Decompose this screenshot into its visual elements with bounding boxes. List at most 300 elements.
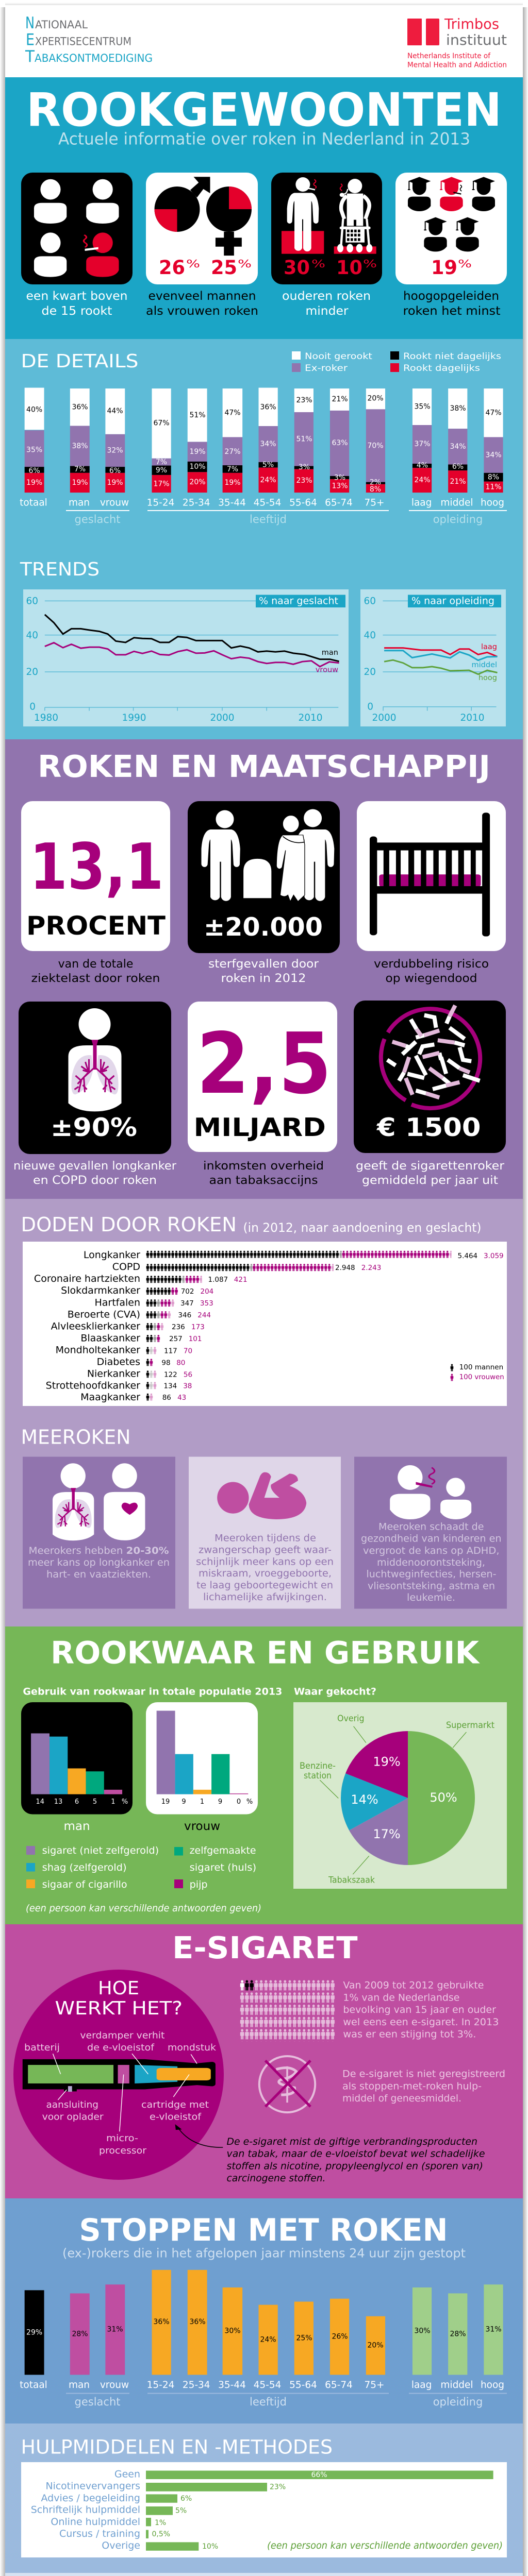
section: rookwaar en gebruik — [5, 1626, 523, 1924]
values: 0,5% — [152, 2530, 170, 2538]
icon: four persons, one smoking — [34, 179, 119, 277]
values: 29% — [26, 2328, 42, 2336]
pictogram chart panel — [23, 1242, 507, 1406]
numbers men: 98 — [161, 1359, 171, 1367]
outer labels: Benzine- — [300, 1761, 336, 1771]
labels: 75+ — [364, 2380, 385, 2391]
bar labels: hoog — [481, 498, 504, 508]
card: 20.000 sterfgevallen — [188, 801, 340, 953]
stacked bar: 45-54: 34% — [260, 440, 276, 448]
stacked bar: vrouw — [105, 388, 125, 493]
line: middel — [384, 651, 497, 660]
title: ROOKWAAR EN GEBRUIK — [51, 1635, 481, 1671]
row labels — [31, 2469, 140, 2551]
labels: man — [69, 2380, 90, 2391]
card: bar chart vrouw: 9 — [218, 1798, 222, 1806]
stacked bar: 65-74: 21% — [332, 395, 348, 403]
row labels — [34, 1249, 140, 1403]
icon: adult smoking next to child — [390, 1465, 471, 1519]
values: 31% — [107, 2326, 123, 2334]
row labels: Slokdarmkanker — [61, 1285, 140, 1296]
subheading: waar gekocht: Waar gekocht? — [294, 1686, 376, 1697]
bar labels: 65-74 — [325, 498, 353, 508]
bar labels: 25-34 — [183, 498, 210, 508]
values: 26% — [332, 2333, 348, 2341]
stacked bar: 15-24: 7% — [156, 458, 167, 466]
stacked bar: middel: 38% — [450, 404, 466, 413]
bar labels: 15-24 — [147, 498, 174, 508]
diagram labels: micro- — [106, 2133, 138, 2144]
icon: person with lungs — [68, 1008, 122, 1111]
diagram labels: de e-vloeistof — [87, 2043, 155, 2053]
text — [28, 1546, 170, 1580]
text: gebruik e-sigaret: Van 2009 tot 2012 gebruikte — [343, 1980, 484, 1991]
group labels: geslacht — [75, 2396, 120, 2408]
logo: Trimbos instituut: Mental Health and Addiction — [407, 61, 507, 69]
card: 1500 euro: € 1500 — [376, 1113, 481, 1142]
numbers women: 70 — [184, 1347, 192, 1355]
group labels — [75, 2396, 483, 2408]
title: ROKEN EN MAATSCHAPPIJ — [38, 749, 490, 784]
section background — [5, 1924, 523, 2198]
panel: meerokers kans — [23, 1457, 175, 1608]
stacked bar: totaal: 35% — [26, 446, 42, 454]
line labels: laag — [481, 643, 497, 651]
axis labels: 20 — [26, 667, 38, 677]
outer labels: Overig — [337, 1714, 364, 1724]
numbers women: 43 — [177, 1394, 186, 1402]
diagram labels: processor — [99, 2146, 147, 2156]
stacked bar: 15-24: 9% — [156, 466, 167, 474]
legend: Rookt niet dagelijks — [403, 351, 501, 362]
stacked bar: laag: 37% — [414, 440, 431, 448]
values: 23% — [270, 2483, 286, 2492]
line: man — [45, 615, 339, 662]
outer labels: station — [304, 1771, 332, 1781]
caption — [403, 290, 500, 318]
stacked bar: totaal: 6% — [28, 467, 40, 475]
card: een kwart rookt — [21, 173, 133, 318]
stacked bar: laag: 35% — [414, 402, 431, 411]
row: strottehoofdkanker — [146, 1382, 157, 1389]
chart: trend naar geslacht — [23, 589, 349, 726]
stacked bar: 55-64: 3% — [299, 463, 310, 471]
text: schadelijke stoffen: stoffen als nicotine, propyleenglycol en (sporen van) — [227, 2160, 483, 2172]
section background — [5, 1626, 523, 1924]
stacked bar: 55-64 — [294, 388, 314, 493]
stacked bar: totaal: 19% — [26, 479, 42, 487]
row: nierkanker — [146, 1370, 157, 1378]
row labels: Schriftelijk hulpmiddel — [31, 2504, 140, 2516]
card: bar chart man: 5 — [93, 1798, 97, 1806]
stacked bar: 15-24 — [152, 388, 171, 493]
labels: 15-24 — [147, 2380, 174, 2391]
legend: shag (zelfgerold) — [42, 1862, 127, 1873]
numbers men: 117 — [164, 1347, 177, 1355]
caption line 2: de 15 rookt — [41, 304, 112, 318]
diagram labels: verdamper verhit — [80, 2031, 165, 2041]
axis labels — [26, 596, 323, 723]
numbers men: 236 — [172, 1323, 185, 1331]
panel: zwangerschap — [189, 1457, 341, 1608]
card: bar chart vrouw: 19 — [161, 1798, 170, 1806]
numbers men: 257 — [169, 1335, 183, 1343]
subheading: gebruik: Gebruik van rookwaar in totale populatie 2013 — [23, 1686, 282, 1697]
caption: een kwart boven — [26, 290, 128, 303]
row labels: Advies / begeleiding — [41, 2493, 140, 2504]
text: schijnlijk meer kans op een — [196, 1556, 334, 1567]
labels: middel — [440, 2380, 473, 2391]
caption: en COPD door roken — [33, 1174, 157, 1187]
numbers women: 56 — [184, 1370, 192, 1379]
stacked bar: man: 36% — [72, 403, 88, 411]
stacked bar: 15-24: 67% — [153, 419, 170, 427]
labels: hoog — [481, 2380, 504, 2391]
section: hulpmiddelen en -methodes — [5, 2424, 523, 2573]
axis labels: 1980 — [34, 713, 58, 723]
text: te laag geboortegewicht en — [196, 1580, 333, 1591]
stacked bar: hoog: 8% — [488, 473, 499, 481]
icon: baby — [217, 1472, 306, 1519]
circle: hoe werkt het: WERKT HET? — [55, 1998, 183, 2019]
section background — [5, 2198, 523, 2424]
row labels: Longkanker — [84, 1249, 140, 1261]
stacked bar: hoog: 11% — [485, 483, 502, 491]
stacked bar: vrouw: 6% — [109, 467, 121, 475]
card: bar chart vrouw: 0 — [237, 1798, 241, 1806]
header band — [25, 14, 507, 69]
card: 90% longkanker: ±90% — [51, 1113, 137, 1142]
numbers women — [176, 1252, 504, 1402]
subtitle: Actuele informatie over roken in Nederland in 2013 — [58, 129, 470, 148]
number 26%: % — [186, 258, 200, 270]
values: 10% — [202, 2543, 218, 2551]
section background — [5, 2573, 523, 2576]
legend: zelfgemaakte — [190, 1845, 256, 1856]
labels: 45-54 — [254, 2380, 281, 2391]
caption: als vrouwen roken — [146, 304, 258, 318]
values: 66% — [311, 2471, 327, 2479]
axis labels: 1990 — [122, 713, 146, 723]
legend — [292, 351, 501, 374]
stacked bar: 45-54: 36% — [260, 403, 276, 411]
caption — [146, 290, 258, 318]
circle: hoe werkt het — [13, 1970, 224, 2180]
card: 2,5 miljard: 2,5 — [196, 1015, 332, 1113]
row: maagkanker — [146, 1394, 153, 1401]
stacked bar: 65-74 — [330, 388, 349, 493]
axis labels: 0 — [367, 702, 373, 712]
axis labels: 2000 — [210, 713, 235, 723]
number 25% — [211, 257, 252, 279]
card: bar chart vrouw — [146, 1702, 258, 1815]
circle: hoe werkt het: HOE — [98, 1978, 139, 1999]
stacked bar: vrouw: 44% — [107, 407, 123, 415]
card: bar chart vrouw: % — [246, 1798, 253, 1806]
caption: inkomsten overheid — [203, 1160, 324, 1173]
logo: Trimbos instituut: Trimbos — [444, 15, 499, 32]
axis labels: 60 — [26, 596, 38, 607]
numbers men: 134 — [163, 1382, 177, 1390]
icon: female symbol — [206, 187, 252, 256]
text: niet geregistreerd: middel of geneesmiddel. — [342, 2093, 461, 2104]
stacked bar: man: 19% — [72, 479, 88, 487]
row labels: Nierkanker — [87, 1368, 140, 1379]
text — [361, 1521, 501, 1603]
card: bar chart vrouw: 1 — [200, 1798, 204, 1806]
bar labels: man — [69, 498, 90, 508]
section: stoppen met roken — [5, 2198, 523, 2424]
number 30%: % — [311, 258, 325, 270]
numbers men: 702 — [181, 1287, 194, 1296]
diagram labels: aansluiting — [46, 2100, 98, 2110]
row labels: Geen — [114, 2469, 140, 2480]
text: gebruik e-sigaret: was er een stijging tot 3%. — [343, 2029, 476, 2040]
stacked bar: middel: 6% — [452, 463, 464, 471]
numbers men: 5.464 — [458, 1252, 477, 1260]
row: diabetes — [146, 1359, 153, 1366]
row labels: Cursus / training — [59, 2528, 140, 2539]
axis labels: 2010 — [460, 713, 485, 723]
stacked bar: 25-34: 19% — [189, 448, 206, 456]
label box: % naar geslacht — [259, 596, 338, 607]
values: 5% — [175, 2507, 187, 2515]
title: STOPPEN MET ROKEN — [79, 2212, 448, 2248]
card: bar chart man — [21, 1702, 133, 1815]
stacked bar: 25-34 — [188, 388, 207, 493]
line: laag — [384, 648, 497, 656]
heading: meeroken: MEEROKEN — [21, 1426, 131, 1449]
caption: geeft de sigarettenroker — [356, 1160, 505, 1173]
row labels: Coronaire hartziekten — [34, 1273, 140, 1284]
line: hoog — [384, 660, 497, 674]
stacked bar: 75+: 2% — [370, 479, 381, 487]
section: doden door roken and meeroken — [5, 1199, 523, 1626]
icon: crossed medical staff — [259, 2056, 315, 2112]
values: 30% — [414, 2327, 431, 2335]
number 19%: % — [458, 258, 472, 270]
values: 24% — [260, 2336, 276, 2344]
stacked bar: 75+: 70% — [367, 442, 384, 450]
stacked bar: middel: 34% — [450, 443, 466, 451]
stacked bar: man: 7% — [74, 465, 86, 473]
stacked bar: 35-44: 27% — [224, 448, 241, 456]
icon: male symbol — [155, 177, 210, 232]
row labels: COPD — [112, 1261, 140, 1273]
bar labels: 35-44 — [218, 498, 246, 508]
group labels: opleiding — [433, 513, 483, 526]
icon: persons with lungs and heart — [53, 1463, 145, 1540]
caption — [13, 1160, 177, 1187]
leader lines — [320, 1726, 466, 1874]
stacked bar: 75+: 20% — [367, 394, 384, 402]
number 10%: 10 — [336, 257, 362, 279]
legend: pijp — [190, 1879, 208, 1890]
row labels: Alvleesklierkanker — [51, 1321, 140, 1332]
logo: Trimbos instituut: instituut — [446, 31, 507, 48]
values: 6% — [180, 2495, 192, 2503]
line labels: hoog — [478, 674, 497, 682]
text: niet geregistreerd: als stoppen-met-roken hulp- — [342, 2080, 482, 2092]
numbers women: 204 — [200, 1287, 213, 1296]
section background — [5, 739, 523, 1199]
labels: totaal — [20, 2380, 47, 2391]
slice labels: 19% — [373, 1755, 401, 1769]
section: rookgewoonten — [5, 77, 523, 339]
stacked bar: 55-64: 23% — [296, 396, 312, 404]
row labels: Beroerte (CVA) — [68, 1309, 140, 1320]
card: mannen en vrouwen — [146, 173, 258, 318]
panel: pie chart waar gekocht — [293, 1702, 507, 1889]
stacked bar: 75+ — [366, 388, 385, 494]
stacked bar: 65-74: 13% — [332, 482, 348, 490]
labels: 65-74 — [325, 2380, 353, 2391]
numbers women: 101 — [189, 1335, 202, 1343]
stacked bar: laag: 24% — [414, 476, 431, 484]
row labels: Strottehoofdkanker — [46, 1380, 140, 1391]
text: niet geregistreerd: De e-sigaret is niet geregistreerd — [342, 2069, 505, 2080]
line: vrouw — [45, 642, 339, 667]
caption: hoogopgeleiden — [403, 290, 499, 303]
group labels: leeftijd — [250, 2396, 287, 2408]
card: bar chart man: 14 — [36, 1798, 44, 1806]
diagram labels: e-vloeistof — [150, 2112, 202, 2123]
group labels: opleiding — [433, 2396, 483, 2408]
group labels — [75, 513, 483, 526]
text: gebruik e-sigaret — [343, 1980, 499, 2040]
section: e-sigaret — [5, 1924, 523, 2198]
logo: Nationaal Expertisecentrum Tabaksontmoediging: ATIONAAL — [35, 19, 88, 31]
stacked bar: totaal: 40% — [26, 405, 42, 414]
outer labels: Tabakszaak — [328, 1875, 375, 1886]
legend — [26, 1845, 256, 1890]
row: mondholtekanker — [146, 1347, 157, 1354]
numbers women: 2.243 — [361, 1264, 381, 1272]
stacked bar: 35-44: 19% — [224, 479, 241, 487]
icon: man and elderly person with walker — [282, 177, 376, 254]
row labels: Nicotinevervangers — [45, 2480, 140, 2492]
stacked bar: middel: 21% — [450, 478, 466, 486]
card: bar chart man: 6 — [75, 1798, 79, 1806]
number 25%: 25 — [211, 257, 237, 279]
label vrouw: vrouw — [184, 1820, 220, 1833]
label box: % naar opleiding — [411, 596, 494, 607]
bar labels: laag — [411, 498, 432, 508]
caption — [208, 958, 319, 985]
row labels: Maagkanker — [80, 1392, 140, 1403]
diagram: e-cigarette — [23, 2054, 216, 2131]
stacked bar: 25-34: 51% — [189, 411, 206, 419]
heading: de details: DE DETAILS — [21, 351, 138, 372]
text: Meeroken schaadt de — [378, 1521, 484, 1532]
bar labels: totaal — [20, 498, 47, 508]
bar labels: middel — [440, 498, 473, 508]
stacked bar: 15-24: 17% — [153, 480, 170, 488]
labels: laag — [411, 2380, 432, 2391]
icon: crib — [370, 812, 490, 937]
caption: op wiegendood — [386, 972, 477, 985]
icon: mourners at a grave — [201, 809, 334, 902]
text: schadelijke stoffen — [227, 2136, 485, 2184]
text: niet geregistreerd — [342, 2069, 505, 2104]
text: miskraam, vroeggeboorte, — [199, 1568, 332, 1579]
axis labels — [364, 596, 485, 723]
text: schadelijke stoffen: carcinogene stoffen. — [227, 2173, 326, 2184]
card: bar chart man: 13 — [54, 1798, 62, 1806]
bar labels: 75+ — [364, 498, 385, 508]
axis labels: 60 — [364, 596, 376, 607]
group labels: geslacht — [75, 513, 120, 526]
logo: Nationaal Expertisecentrum Tabaksontmoediging: N — [25, 14, 35, 32]
legend: Rookt dagelijks — [403, 363, 480, 374]
legend: sigaret (huls) — [190, 1862, 256, 1873]
caption — [282, 290, 371, 318]
section background — [5, 1199, 523, 1626]
text: schadelijke stoffen: van tabak, maar de e-vloeistof bevat wel schadelijke — [227, 2148, 485, 2160]
row labels: Online hulpmiddel — [51, 2516, 140, 2528]
text: vliesontsteking, astma en — [368, 1581, 495, 1592]
caption: sterfgevallen door — [208, 958, 319, 971]
row: blaaskanker — [146, 1335, 160, 1342]
number 25%: % — [238, 258, 252, 270]
stacked bar: laag: 4% — [417, 462, 428, 470]
row: beroerte — [146, 1311, 171, 1318]
number 19%: 19 — [431, 257, 457, 279]
stacked bar: middel — [448, 388, 467, 493]
labels: 25-34 — [183, 2380, 210, 2391]
label man: man — [63, 1820, 90, 1833]
labels: 55-64 — [289, 2380, 317, 2391]
stacked bar: 35-44 — [223, 388, 242, 493]
number 30%: 30 — [284, 257, 310, 279]
heading: doden door roken: (in 2012, naar aandoening en geslacht) — [243, 1221, 482, 1235]
card: 13,1 procent: 13,1 — [30, 831, 164, 904]
bar labels: vrouw — [100, 498, 129, 508]
text — [196, 1533, 334, 1603]
legend: 100 vrouwen — [459, 1373, 504, 1381]
line labels — [471, 643, 497, 682]
numbers men: 347 — [180, 1299, 194, 1308]
text: zwangerschap geeft waar- — [199, 1545, 332, 1555]
section: de details and trends — [5, 339, 523, 739]
line labels: middel — [471, 661, 497, 669]
stacked bar: 25-34: 10% — [189, 463, 206, 471]
values: 25% — [296, 2334, 312, 2342]
card: 1500 euro — [354, 1001, 506, 1153]
stacked bar: 65-74: 3% — [334, 474, 345, 482]
text: gebruik e-sigaret: bevolking van 15 jaar en ouder — [343, 2004, 496, 2015]
numbers men: 1.087 — [208, 1276, 228, 1284]
caption: gemiddeld per jaar uit — [362, 1174, 498, 1187]
values — [26, 2318, 502, 2350]
axis labels: 40 — [26, 630, 38, 641]
heading: HULPMIDDELEN EN -METHODES — [21, 2436, 333, 2459]
row labels: Hartfalen — [94, 1297, 140, 1309]
heading: trends: TRENDS — [20, 559, 100, 580]
card: 2,5 miljard — [188, 1002, 337, 1152]
slice labels: 17% — [373, 1827, 401, 1841]
numbers men: 86 — [162, 1394, 171, 1402]
caption — [203, 1160, 324, 1187]
heading: doden door roken: DODEN DOOR ROKEN — [21, 1213, 237, 1236]
bar chart panel — [21, 2462, 507, 2557]
slice labels — [351, 1755, 457, 1841]
text: gebruik e-sigaret: wel eens een e-sigaret. In 2013 — [343, 2016, 499, 2028]
row: slokdarmkanker — [146, 1287, 178, 1295]
logo: Nationaal Expertisecentrum Tabaksontmoediging — [25, 14, 153, 66]
logo: Nationaal Expertisecentrum Tabaksontmoediging: T — [25, 47, 35, 66]
legend: Ex-roker — [305, 363, 348, 374]
